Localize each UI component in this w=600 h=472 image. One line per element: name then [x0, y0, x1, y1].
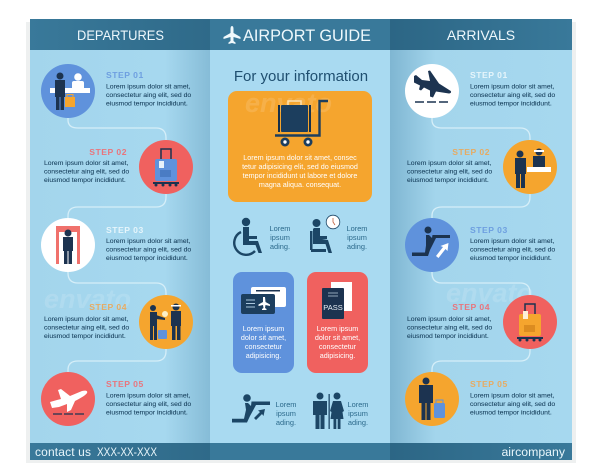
arrivals step 5 text: consectetur aing elit, sed do — [470, 401, 555, 408]
contact footer: XXX-XX-XXX — [97, 445, 157, 459]
step 4 text: STEP 04 — [89, 302, 127, 312]
watermark left: envato — [44, 284, 131, 314]
icon: passenger with luggage — [405, 372, 459, 426]
arrivals step 4 text: Lorem ipsum dolor sit amet, — [407, 316, 492, 323]
restroom text: Lorem — [348, 400, 368, 409]
step 1 text: Lorem ipsum dolor sit amet, — [106, 84, 191, 90]
arrivals step 4 text: STEP 04 — [452, 302, 490, 312]
arrivals step 2 text: STEP 02 — [452, 147, 490, 157]
step 3 text: STEP 03 — [106, 225, 144, 235]
step 4 text — [44, 302, 129, 340]
arrivals step 1 text: consectetur aing elit, sed do — [470, 92, 555, 99]
step 3 text: Lorem ipsum dolor sit amet, — [106, 238, 191, 245]
panel: arrivals — [390, 19, 572, 460]
arrivals step 5 text — [470, 379, 555, 416]
escalator text: ipsum — [276, 409, 296, 418]
for your information heading: For your information — [234, 68, 368, 85]
step 5 text: consectetur aing elit, sed do — [106, 401, 191, 408]
step 5 text: Lorem ipsum dolor sit amet, — [106, 392, 191, 400]
step 2 text — [44, 147, 129, 184]
arrivals step 1 text: Lorem ipsum dolor sit amet, — [470, 84, 555, 90]
step 2 text: STEP 02 — [89, 147, 127, 157]
escalator text: ading. — [276, 418, 296, 427]
step 1 text: consectetur aing elit, sed do — [106, 92, 191, 99]
icon: security gate — [41, 218, 95, 272]
passport text: consectetur — [319, 342, 357, 351]
arrivals step 4 text — [407, 302, 492, 340]
guide header: AIRPORT GUIDE — [243, 26, 371, 45]
orange card text: tempor incididunt ut labore et dolore — [243, 171, 357, 180]
step 5 text — [106, 379, 191, 416]
escalator text — [276, 400, 296, 427]
icon: landing plane — [405, 64, 459, 118]
wheelchair text: ipsum — [270, 233, 290, 242]
step 3 text — [106, 225, 191, 262]
arrivals step 3 text: Lorem ipsum dolor sit amet, — [470, 238, 555, 245]
icon: check-in desk — [41, 64, 95, 118]
icon: luggage trolley — [275, 101, 328, 146]
arrivals step 2 text: Lorem ipsum dolor sit amet, — [407, 160, 492, 167]
aircompany footer — [390, 443, 572, 460]
orange card text: magna aliqua. consequat. — [259, 180, 341, 189]
icon: tickets — [241, 287, 286, 314]
step 5 text: eiusmod tempor incididunt. — [106, 410, 188, 416]
departures route line — [68, 118, 166, 372]
wheelchair text: ading. — [270, 242, 290, 251]
departures header: DEPARTURES — [77, 27, 164, 43]
arrivals step 1 text: STEP 01 — [470, 70, 508, 80]
passport text — [315, 324, 360, 360]
boarding text: dolor sit amet, — [241, 333, 286, 342]
icon: arrivals escalator — [405, 218, 459, 272]
arrivals step 4 text: consectetur aing elit, sed do — [407, 324, 492, 332]
panel: boarding card — [233, 272, 294, 373]
step 2 text: Lorem ipsum dolor sit amet, — [44, 160, 129, 167]
guide footer band — [210, 443, 390, 460]
arrivals step 2 text: eiusmod tempor incididunt. — [407, 177, 489, 184]
step 3 text: consectetur aing elit, sed do — [106, 246, 191, 254]
icon: wheelchair — [234, 218, 262, 255]
arrivals step 1 text: eiusmod tempor incididunt. — [470, 100, 552, 108]
icon: departing plane — [41, 372, 95, 426]
panel: airport guide — [210, 19, 390, 460]
panel: departures — [30, 19, 210, 460]
icon: passport control — [503, 140, 557, 194]
step 2 text: eiusmod tempor incididunt. — [44, 177, 126, 184]
step 4 text: Lorem ipsum dolor sit amet, — [44, 316, 129, 323]
icon: luggage on belt — [139, 140, 193, 194]
step 4 text: eiusmod tempor incididunt. — [44, 333, 126, 340]
restroom text — [348, 400, 368, 427]
departures header — [30, 19, 210, 50]
icon: luggage inspection — [139, 295, 193, 349]
icon: escalator — [232, 394, 270, 422]
contact footer — [30, 443, 210, 460]
icon: passport: PASS — [323, 303, 343, 312]
arrivals step 3 text: STEP 03 — [470, 225, 508, 235]
escalator text: Lorem — [276, 400, 296, 409]
passport text: Lorem ipsum — [317, 324, 358, 333]
restroom text: ipsum — [348, 409, 368, 418]
panel: passport card — [307, 272, 368, 373]
icon: baggage claim — [503, 295, 557, 349]
step 5 text: STEP 05 — [106, 379, 144, 389]
arrivals step 3 text: eiusmod tempor incididunt. — [470, 255, 552, 262]
arrivals step 2 text: consectetur aing elit, sed do — [407, 168, 492, 176]
step 2 text: consectetur aing elit, sed do — [44, 168, 129, 176]
waiting text — [347, 224, 367, 251]
contact footer: contact us — [35, 445, 91, 459]
wheelchair text — [270, 224, 290, 251]
waiting text: ipsum — [347, 233, 367, 242]
step 3 text: eiusmod tempor incididunt. — [106, 255, 188, 262]
watermark right: envato — [446, 278, 533, 308]
boarding text: consectetur — [245, 342, 283, 351]
panel: orange info card — [228, 88, 372, 202]
arrivals step 3 text — [470, 225, 555, 262]
step 4 text: consectetur aing elit, sed do — [44, 324, 129, 332]
arrivals step 1 text — [470, 70, 555, 108]
step 1 text: STEP 01 — [106, 70, 144, 80]
orange card text: tetur adipisicing elit, sed do eiusmod — [242, 162, 358, 171]
restroom text: ading. — [348, 418, 368, 427]
icon: restroom — [313, 392, 344, 429]
step 1 text — [106, 70, 191, 108]
arrivals step 5 text: Lorem ipsum dolor sit amet, — [470, 392, 555, 400]
passport text: adipisicing. — [320, 351, 355, 360]
boarding text — [241, 324, 286, 360]
orange card text — [242, 153, 358, 189]
watermark center: envato — [245, 88, 332, 118]
icon: waiting seat with clock — [310, 215, 340, 253]
arrivals step 4 text: eiusmod tempor incididunt. — [407, 333, 489, 340]
arrivals header: ARRIVALS — [447, 27, 515, 43]
arrivals step 2 text — [407, 147, 492, 184]
arrivals step 3 text: consectetur aing elit, sed do — [470, 246, 555, 254]
boarding text: adipisicing. — [246, 351, 281, 360]
arrivals step 5 text: STEP 05 — [470, 379, 508, 389]
orange card text: Lorem ipsum dolor sit amet, consec — [243, 153, 357, 162]
guide header — [210, 19, 390, 50]
arrivals header — [390, 19, 572, 50]
step 1 text: eiusmod tempor incididunt. — [106, 100, 188, 108]
aircompany footer: aircompany — [501, 445, 566, 459]
icon: header plane — [224, 26, 240, 44]
boarding text: Lorem ipsum — [243, 324, 284, 333]
waiting text: Lorem — [347, 224, 367, 233]
arrivals step 5 text: eiusmod tempor incididunt. — [470, 410, 552, 416]
wheelchair text: Lorem — [270, 224, 290, 233]
arrivals route line — [432, 118, 530, 372]
waiting text: ading. — [347, 242, 367, 251]
passport text: dolor sit amet, — [315, 333, 360, 342]
